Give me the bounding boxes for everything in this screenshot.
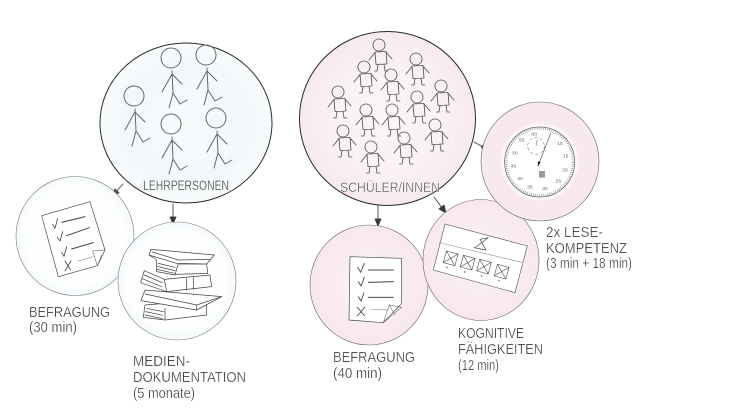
label: kognitive Fähigkeiten: FÄHIGKEITEN <box>458 341 543 358</box>
icon: stopwatch: 15 <box>563 154 569 160</box>
panel: Befragung Schüler/innen <box>310 225 428 345</box>
icon: questionnaire <box>349 257 402 323</box>
label: Lesekompetenz: KOMPETENZ <box>546 240 627 257</box>
icon: stopwatch: 10 <box>557 141 563 147</box>
icon: stack of books <box>141 249 222 320</box>
panel: kognitive Fähigkeiten <box>423 200 539 320</box>
icon: stopwatch: 50 <box>512 150 518 156</box>
icon: stopwatch <box>501 123 578 201</box>
label: kognitive Fähigkeiten: KOGNITIVE <box>458 325 524 342</box>
label: Mediendokumentation: (5 monate) <box>133 385 195 402</box>
icon: stopwatch: 40 <box>517 176 523 182</box>
icon: stopwatch: 60 <box>532 131 537 137</box>
label: Lesekompetenz: 2x LESE- <box>546 224 603 241</box>
arrow: Schüler/innen to Befragung <box>375 205 381 226</box>
arrow: Lehrpersonen to Befragung <box>113 184 123 195</box>
heading: Schüler/innen: SCHÜLER/INNEN <box>340 178 440 195</box>
student figures <box>328 39 454 173</box>
icon: stopwatch: 35 <box>527 184 533 190</box>
label: Befragung 30 min: BEFRAGUNG <box>29 304 110 321</box>
label: Lesekompetenz: (3 min + 18 min) <box>546 255 632 272</box>
label: Befragung 30 min: (30 min) <box>29 319 77 336</box>
label: Mediendokumentation: MEDIEN- <box>133 353 190 370</box>
icon: stopwatch: 45 <box>511 164 516 170</box>
panel: Lesekompetenz <box>481 102 599 221</box>
arrow: Schüler/innen to kognitive Fähigkeiten <box>434 197 446 213</box>
panel: Schüler/innen <box>300 32 476 206</box>
label: Befragung 40 min: BEFRAGUNG <box>333 349 415 366</box>
icon: cognitive test card <box>433 224 527 293</box>
panel: Befragung Lehrpersonen <box>16 176 134 296</box>
label: kognitive Fähigkeiten: (12 min) <box>458 357 499 374</box>
panel: Mediendokumentation <box>118 222 236 340</box>
arrow: Schüler/innen to Lesekompetenz <box>474 142 484 148</box>
label: Mediendokumentation: DOKUMENTATION <box>133 369 246 386</box>
icon: stopwatch: 30 <box>542 186 548 192</box>
icon: stopwatch: 20 <box>562 168 568 174</box>
teacher figures <box>124 45 232 174</box>
label: Befragung 40 min: (40 min) <box>333 365 382 382</box>
arrow: Lehrpersonen to Mediendokumentation <box>170 204 176 224</box>
icon: stopwatch: 25 <box>556 179 561 185</box>
icon: questionnaire <box>42 202 105 277</box>
panel: Lehrpersonen <box>100 43 272 203</box>
heading: Lehrpersonen: LEHRPERSONEN <box>143 177 229 193</box>
icon: stopwatch: 55 <box>519 138 525 144</box>
